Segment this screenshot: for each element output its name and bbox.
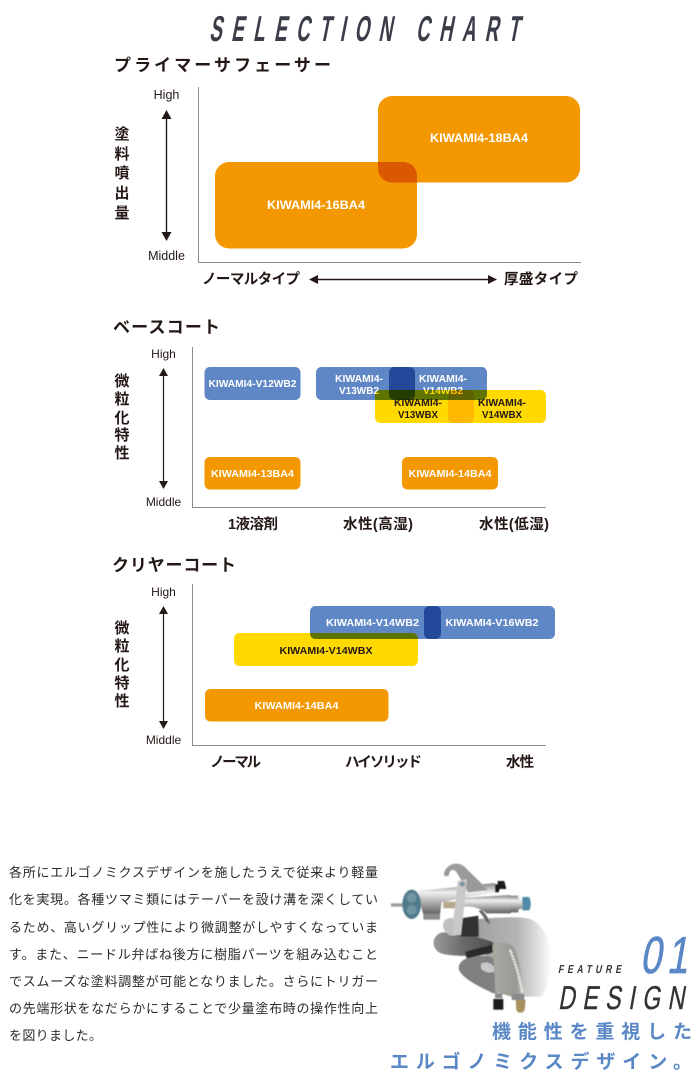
panel: base coat chart bbox=[113, 318, 549, 533]
chart axes bbox=[198, 87, 581, 262]
heading: clear coat: クリヤーコート bbox=[112, 556, 236, 575]
bar: KIWAMI4-V14WB2 bbox=[389, 367, 487, 400]
y axis title: 出 bbox=[114, 185, 130, 202]
y axis title: 噴 bbox=[114, 164, 130, 182]
tagline: 機能性を重視した bbox=[492, 1021, 692, 1043]
x axis left label: ノーマルタイプ bbox=[202, 271, 300, 288]
bar: KIWAMI4-V12WB2 bbox=[204, 367, 300, 400]
arrow: horizontal bbox=[309, 275, 497, 284]
x axis label: waterborne high humidity: 水性(高湿) bbox=[343, 516, 413, 533]
chart axes bbox=[192, 584, 546, 746]
bar: KIWAMI4-V13WB2: V13WB2 bbox=[339, 385, 379, 397]
x axis label: waterborne: 水性 bbox=[506, 754, 534, 771]
title: SELECTION CHART bbox=[207, 10, 525, 50]
bar: KIWAMI4-V13WB2 bbox=[316, 367, 415, 400]
y axis high label: High bbox=[151, 585, 176, 599]
bar overlap bbox=[378, 162, 417, 182]
arrow: vertical bbox=[159, 368, 168, 489]
bar: KIWAMI4-V14WB2: KIWAMI4-V14WB2 bbox=[326, 617, 419, 629]
y axis title: 量 bbox=[114, 205, 130, 222]
y axis middle label: Middle bbox=[146, 733, 181, 747]
y axis title: 特 bbox=[114, 426, 130, 444]
y axis title: 粒 bbox=[114, 390, 130, 408]
y axis title: 微 bbox=[114, 372, 130, 390]
y axis title: 化 bbox=[114, 657, 130, 674]
text block: design description: 化を実現。各種ツマミ類にはテーパーを設け溝を深くしてい bbox=[9, 892, 378, 907]
text block: design description: でスムーズな塗料調整が可能となりました。さらにトリガー bbox=[9, 974, 378, 989]
bar: KIWAMI4-V13WBX: KIWAMI4- bbox=[394, 397, 442, 409]
bar: KIWAMI4-18BA4 bbox=[378, 96, 580, 182]
y axis title: 性 bbox=[114, 693, 130, 710]
bar: KIWAMI4-V13WBX bbox=[375, 390, 474, 423]
text block: design description: 各所にエルゴノミクスデザインを施したうえで従来より軽量 bbox=[9, 865, 378, 880]
bar: KIWAMI4-14BA4 bbox=[205, 689, 388, 722]
y axis title: 微 bbox=[114, 619, 130, 637]
x axis label: one-pack solvent: 1液溶剤 bbox=[228, 515, 278, 533]
bar: KIWAMI4-V14WBX: KIWAMI4-V14WBX bbox=[280, 645, 372, 657]
bar: KIWAMI4-V13WBX: V13WBX bbox=[398, 409, 438, 421]
bar: KIWAMI4-V14WBX bbox=[448, 390, 546, 423]
y axis title: 化 bbox=[114, 410, 130, 427]
arrow: vertical bbox=[162, 110, 172, 241]
bar: KIWAMI4-16BA4: KIWAMI4-16BA4 bbox=[267, 198, 365, 212]
feature label: FEATURE bbox=[557, 964, 623, 976]
bar: KIWAMI4-18BA4: KIWAMI4-18BA4 bbox=[430, 131, 528, 145]
bar: KIWAMI4-V16WB2: KIWAMI4-V16WB2 bbox=[446, 617, 539, 629]
x axis label: waterborne low humidity: 水性(低湿) bbox=[479, 516, 549, 533]
text block: design description: を図りました。 bbox=[9, 1028, 102, 1043]
y axis high label: High bbox=[151, 347, 176, 361]
panel: clear coat chart bbox=[112, 556, 555, 771]
text block: design description bbox=[9, 865, 378, 1043]
heading: base coat: ベースコート bbox=[113, 318, 220, 337]
bar: KIWAMI4-V14WBX: KIWAMI4- bbox=[478, 397, 526, 409]
icon: spray gun held in hand bbox=[391, 864, 552, 1013]
bar: KIWAMI4-13BA4: KIWAMI4-13BA4 bbox=[211, 468, 294, 480]
bar: KIWAMI4-V14WB2: KIWAMI4- bbox=[419, 373, 467, 385]
arrow: vertical bbox=[159, 606, 168, 729]
bar: KIWAMI4-V14WB2: V14WB2 bbox=[423, 385, 463, 397]
bar: KIWAMI4-V13WB2: KIWAMI4- bbox=[335, 373, 383, 385]
bar: KIWAMI4-14BA4: KIWAMI4-14BA4 bbox=[254, 700, 339, 712]
text block: design description: るため、高いグリップ性により微調整がしやすくなっていま bbox=[9, 920, 378, 935]
bar: KIWAMI4-V14WBX: V14WBX bbox=[482, 409, 522, 421]
y axis title bbox=[114, 126, 130, 222]
tagline: エルゴノミクスデザイン。 bbox=[390, 1050, 692, 1073]
bar: KIWAMI4-V16WB2 bbox=[424, 606, 555, 639]
x axis label: high solid: ハイソリッド bbox=[345, 755, 422, 771]
bar: KIWAMI4-14BA4: KIWAMI4-14BA4 bbox=[408, 468, 492, 480]
x axis right label: 厚盛タイプ bbox=[504, 270, 578, 288]
bar: KIWAMI4-14BA4 bbox=[402, 457, 498, 490]
y axis title: 特 bbox=[114, 674, 130, 692]
bar: KIWAMI4-V14WBX bbox=[234, 633, 418, 666]
y axis title bbox=[114, 619, 130, 710]
feature number 01: 01 bbox=[638, 926, 696, 984]
bar: KIWAMI4-V14WB2 bbox=[310, 606, 441, 639]
y axis title: 塗 bbox=[114, 126, 130, 143]
bar: KIWAMI4-V12WB2: KIWAMI4-V12WB2 bbox=[208, 378, 297, 390]
y axis middle label: Middle bbox=[146, 495, 181, 509]
bar: KIWAMI4-13BA4 bbox=[204, 457, 300, 490]
y axis title bbox=[114, 372, 130, 462]
heading: primer surfacer: プライマーサフェーサー bbox=[114, 56, 331, 75]
y axis high label: High bbox=[154, 88, 179, 102]
y axis middle label: Middle bbox=[148, 249, 185, 263]
chart axes bbox=[192, 347, 546, 508]
tagline bbox=[390, 1021, 692, 1073]
text block: design description: の先端形状をなだらかにすることで少量塗布時の操作性向上 bbox=[9, 1001, 378, 1016]
x axis label: normal: ノーマル bbox=[210, 755, 262, 771]
y axis title: 粒 bbox=[114, 637, 130, 655]
y axis title: 性 bbox=[114, 445, 130, 462]
y axis title: 料 bbox=[114, 145, 130, 163]
panel: primer surfacer chart bbox=[114, 56, 581, 288]
bar: KIWAMI4-16BA4 bbox=[215, 162, 417, 248]
feature title DESIGN: DESIGN bbox=[557, 980, 689, 1017]
text block: design description: す。また、ニードル弁ばね後方に樹脂パーツを組み込むこと bbox=[9, 947, 378, 962]
